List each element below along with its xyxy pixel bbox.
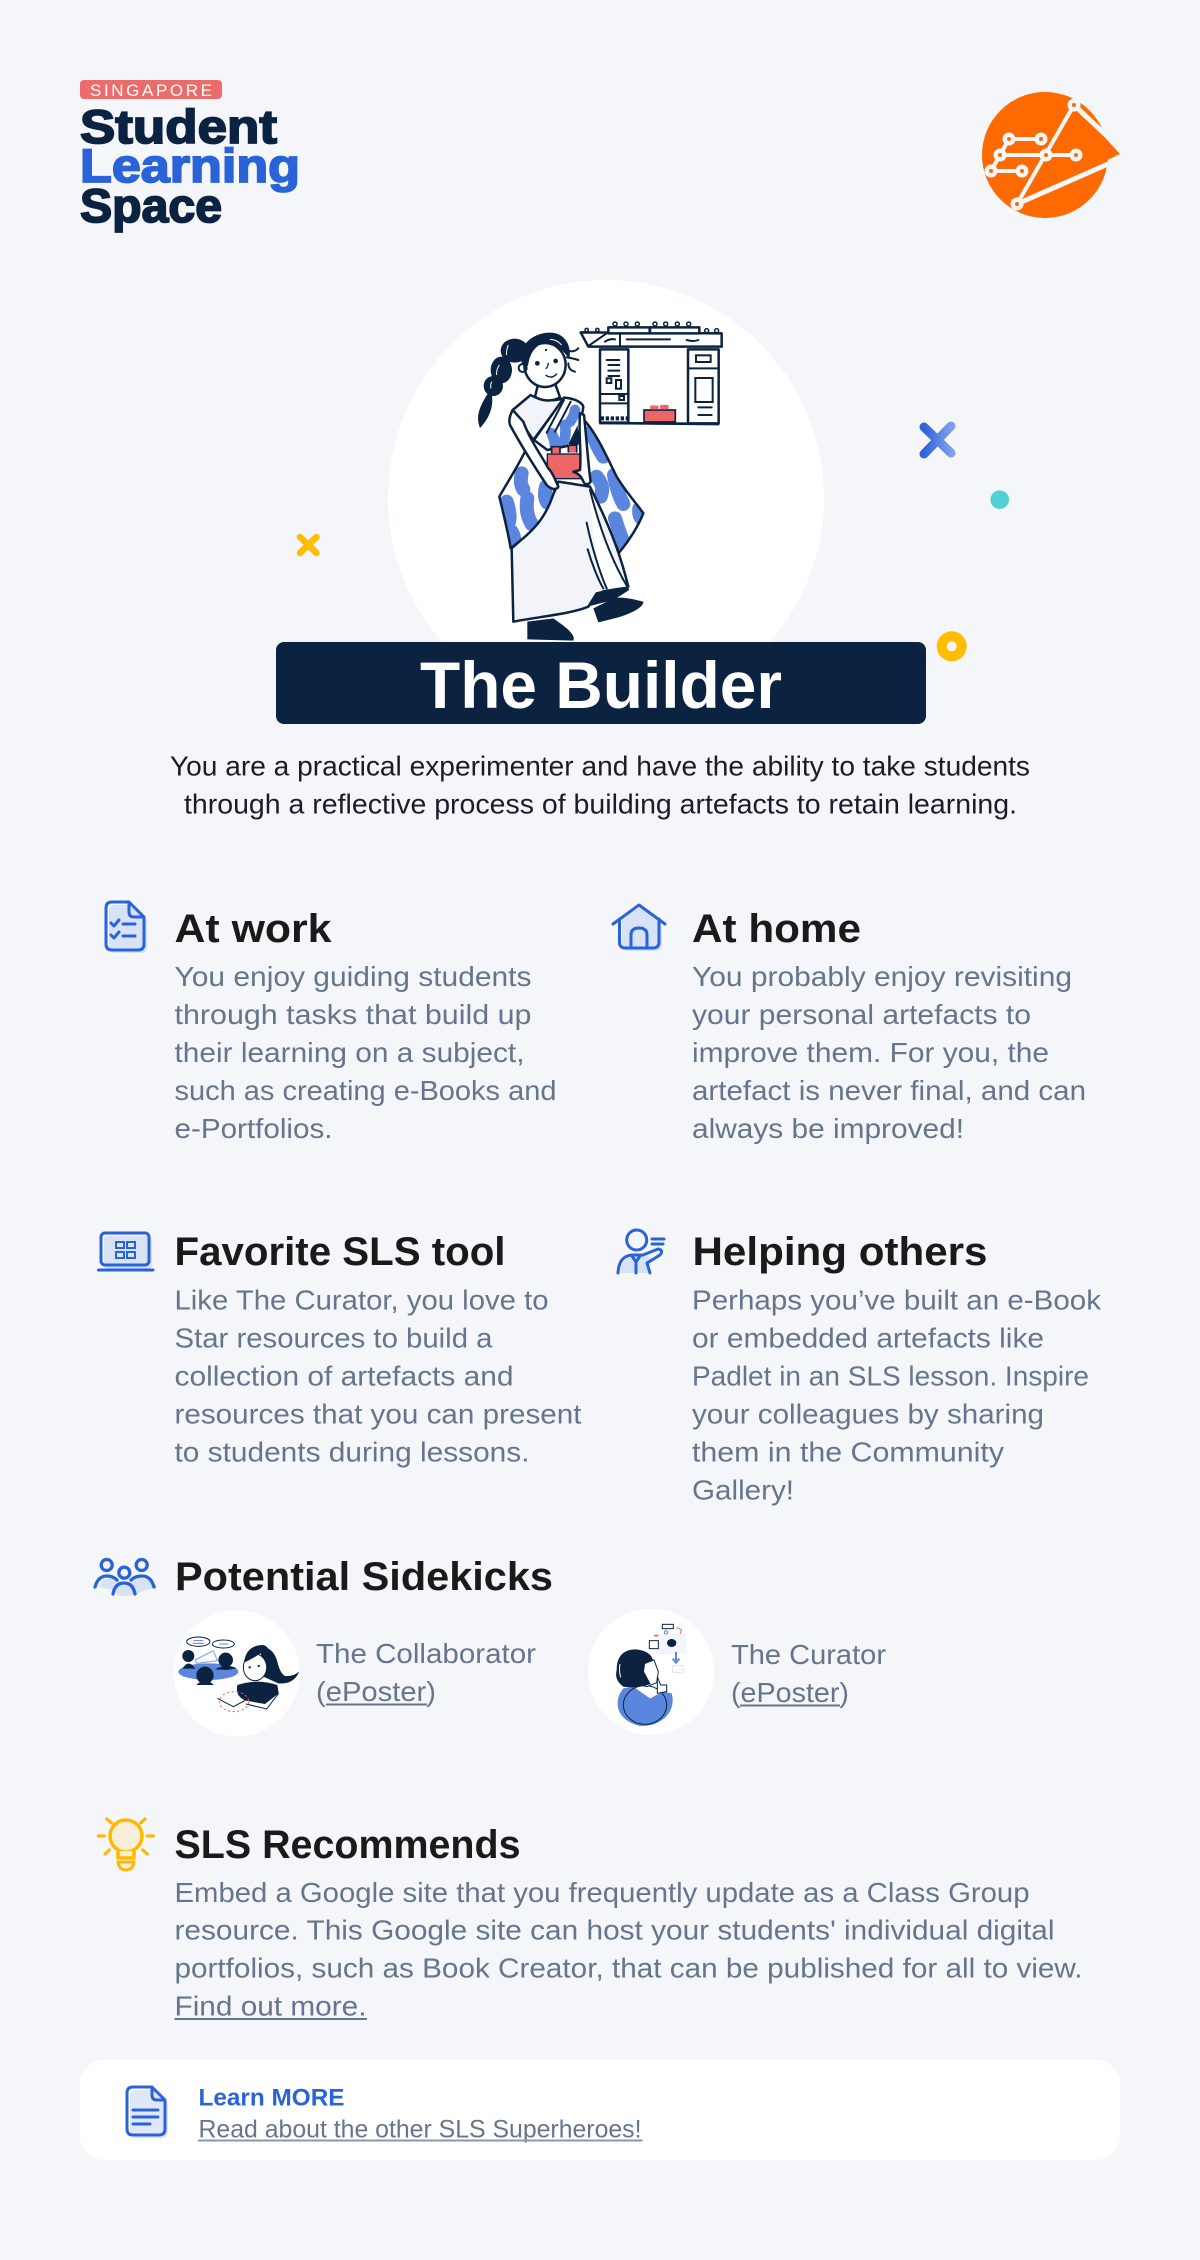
decoration: blue cross	[924, 426, 951, 454]
neck and head	[519, 333, 578, 401]
title banner: The Builder	[420, 648, 782, 722]
building made of blocks	[581, 322, 722, 424]
left saree drape	[499, 447, 555, 548]
decoration: yellow cross	[300, 537, 316, 553]
body: at work: such as creating e-Books and	[174, 1075, 556, 1106]
brick held in arms	[547, 445, 583, 479]
heading: favorite SLS tool: Favorite SLS tool	[174, 1230, 506, 1274]
body: SLS recommends: portfolios, such as Book Creator, that can be published for all to view.	[174, 1952, 1082, 1984]
body: at work: through tasks that build up	[174, 999, 532, 1030]
heading: at home: At home	[692, 907, 861, 951]
body: helping others: Padlet in an SLS lesson. Inspire	[692, 1360, 1089, 1392]
body: helping others	[692, 1284, 1102, 1506]
body: favorite SLS tool: collection of artefacts and	[174, 1360, 514, 1392]
sidekick label: the collaborator: (ePoster)	[316, 1676, 436, 1707]
braid	[478, 339, 529, 428]
heading: at work: At work	[174, 907, 332, 951]
sidekick label: the curator: (ePoster)	[731, 1677, 849, 1708]
body: favorite SLS tool: Like The Curator, you love to	[174, 1284, 548, 1316]
heading: SLS recommends: SLS Recommends	[174, 1823, 520, 1867]
panel: potential sidekicks	[95, 1555, 886, 1736]
body: favorite SLS tool: to students during lessons.	[174, 1436, 530, 1468]
heading: potential sidekicks: Potential Sidekicks	[175, 1555, 553, 1599]
sidekick label: the curator	[731, 1639, 886, 1708]
body: helping others: or embedded artefacts like	[692, 1322, 1044, 1354]
link text: Read about the other SLS Superheroes!	[198, 2116, 642, 2144]
icon: group of people	[95, 1560, 158, 1596]
body: SLS recommends: Embed a Google site that you frequently update as a Class Group	[174, 1877, 1030, 1908]
intro text: through a reflective process of building artefacts to retain learning.	[184, 788, 1017, 820]
body: favorite SLS tool: resources that you can present	[174, 1398, 582, 1430]
saree skirt	[512, 482, 628, 622]
logo wordmark: Student	[80, 100, 277, 153]
hero illustration: woman in saree with building	[478, 322, 722, 641]
link text: Learn MORE	[198, 2084, 344, 2112]
body: helping others: your colleagues by sharing	[692, 1398, 1044, 1430]
shoes	[527, 587, 643, 641]
title banner	[276, 642, 926, 724]
body: at work: e-Portfolios.	[174, 1113, 332, 1144]
icon: light bulb	[98, 1819, 153, 1870]
logo badge: SINGAPORE	[90, 81, 212, 100]
logo: Singapore Student Learning Space	[80, 80, 300, 232]
icon: house	[613, 905, 665, 951]
arms	[509, 410, 591, 489]
body: at work: their learning on a subject,	[174, 1037, 524, 1068]
body: helping others: Gallery!	[692, 1474, 794, 1506]
icon: checklist document	[106, 902, 147, 953]
sidekick label: the collaborator: The Collaborator	[316, 1638, 536, 1669]
panel: at work	[106, 902, 556, 1144]
body: at work: You enjoy guiding students	[174, 961, 532, 992]
hero white circle	[388, 280, 824, 716]
body: SLS recommends: resource. This Google site can host your students' individual digital	[174, 1914, 1054, 1946]
icon: laptop grid	[98, 1233, 153, 1270]
intro text	[170, 750, 1030, 820]
body: SLS recommends	[174, 1877, 1082, 2022]
decoration: teal dot	[990, 490, 1009, 509]
sidekick: the collaborator illustration	[174, 1610, 300, 1736]
blouse and sash	[513, 395, 583, 450]
body: at work	[174, 961, 556, 1144]
icon: orange network logo	[982, 92, 1120, 218]
body: SLS recommends: Find out more.	[174, 1990, 366, 2022]
right saree drape	[584, 420, 643, 552]
panel: SLS recommends	[98, 1819, 1083, 2022]
logo wordmark: Learning	[80, 139, 300, 192]
sidekick: the curator illustration	[588, 1609, 714, 1735]
body: at home: improve them. For you, the	[692, 1037, 1049, 1068]
body: favorite SLS tool: Star resources to build a	[174, 1322, 493, 1354]
body: at home: your personal artefacts to	[692, 999, 1031, 1030]
card: learn more	[80, 2060, 1120, 2160]
icon: person presenting	[618, 1230, 664, 1273]
logo wordmark: Space	[80, 179, 222, 232]
body: helping others: them in the Community	[692, 1436, 1004, 1468]
link text	[198, 2084, 642, 2144]
icon: document	[127, 2087, 168, 2138]
heading: helping others: Helping others	[692, 1230, 988, 1274]
panel: at home	[613, 905, 1086, 1144]
body: at home: always be improved!	[692, 1113, 964, 1144]
body: favorite SLS tool	[174, 1284, 582, 1468]
decoration: yellow ring	[942, 636, 962, 656]
panel: helping others	[618, 1230, 1102, 1506]
body: at home	[692, 961, 1086, 1144]
sidekick label: the collaborator	[316, 1638, 536, 1707]
intro text: You are a practical experimenter and have the ability to take students	[170, 750, 1030, 782]
body: at home: artefact is never final, and can	[692, 1075, 1086, 1106]
body: helping others: Perhaps you’ve built an e-Book	[692, 1284, 1102, 1316]
body: at home: You probably enjoy revisiting	[692, 961, 1072, 992]
sidekick label: the curator: The Curator	[731, 1639, 886, 1670]
panel: favorite SLS tool	[98, 1230, 582, 1468]
logo wordmark	[80, 100, 300, 232]
